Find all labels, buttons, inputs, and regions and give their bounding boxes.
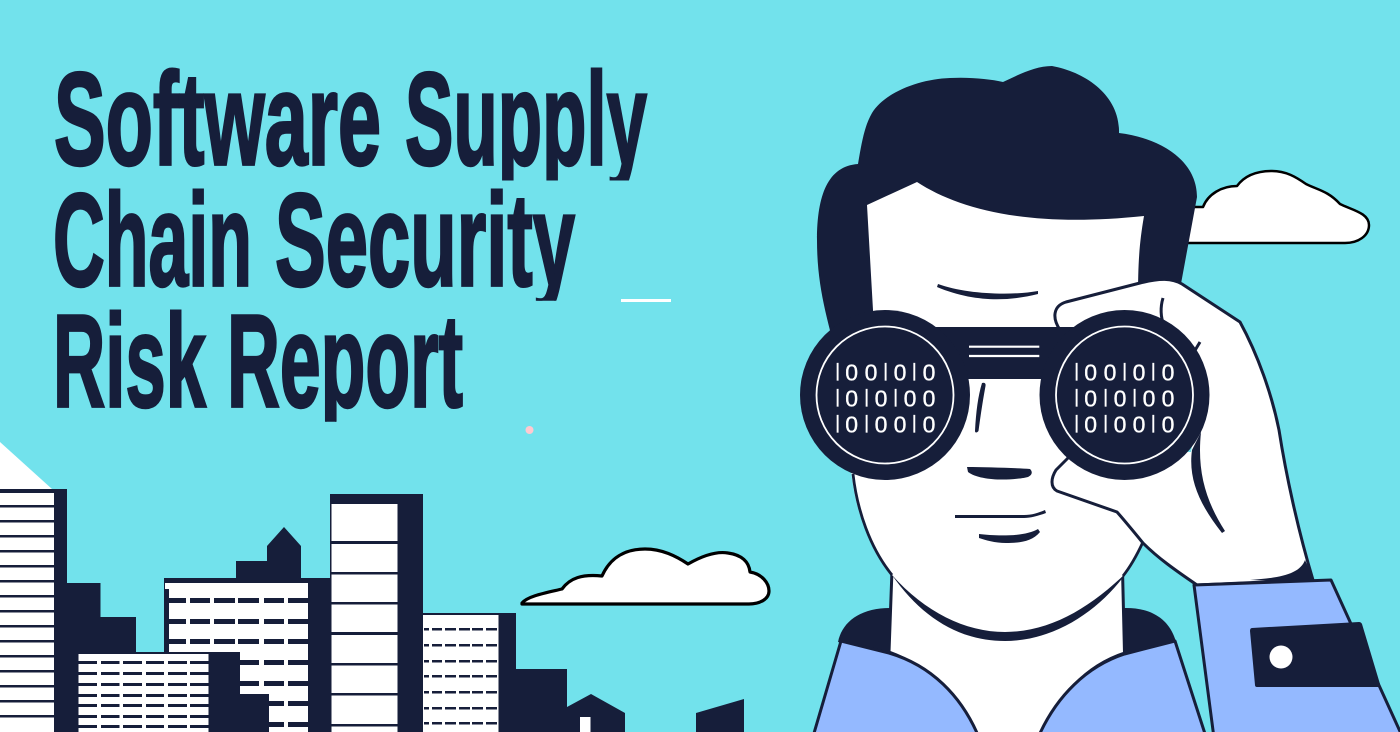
left lens binary digits: 0000 [845,411,935,437]
building: middle with spire [164,527,331,732]
building: dark block [240,694,269,732]
binoculars [800,310,1210,480]
title: Report [227,288,463,434]
pink dot accent [526,426,534,434]
shirt: left collar [812,641,980,732]
building: right striped [423,613,516,732]
shirt: dark inner collar [838,608,1176,656]
binoculars bridge [885,327,1125,379]
house window [580,717,590,732]
palm crease [1191,432,1225,533]
small gap behind binoculars [1187,446,1192,452]
cityscape [0,442,744,732]
title [53,46,647,434]
left lens binary digits [835,359,935,437]
right lens binary digits [1074,359,1174,437]
title: Security [275,166,575,314]
right lens binary digits: ||| [1074,386,1137,406]
right lens [1040,310,1210,480]
nose shadow [967,467,1032,480]
neck [889,570,1124,732]
chin shadow [892,572,1127,641]
left lens binary digits: ||| [835,412,917,432]
mouth [955,510,1046,543]
right lens binary digits: ||| [1074,412,1156,432]
person illustration [800,66,1400,732]
left lens binary digits: 0000 [845,359,935,385]
title: Chain [53,166,252,314]
right lens binary digits: 0000 [1084,359,1174,385]
knuckle tick [1194,342,1200,352]
sleeve [1194,580,1400,732]
left lens binary digits: ||| [835,360,917,380]
left lens binary digits: 0000 [845,385,935,411]
title: Software [54,46,381,192]
bridge detail lines [969,347,1039,356]
wrist shadow [1250,560,1315,582]
nose bridge line [975,383,986,432]
face [851,182,1200,632]
cloud: upper behind head [1180,171,1369,243]
left lens [800,310,970,480]
finger crease [1161,298,1164,326]
title: Risk [53,288,206,434]
title: Supply [405,46,647,192]
left lens binary digits: ||| [835,386,898,406]
right lens binary digits: 0000 [1084,411,1174,437]
cuff button strap [1250,622,1380,687]
building: far left striped tower [0,442,67,732]
face lower outline [853,474,1143,576]
right lens binary digits: 0000 [1084,385,1174,411]
hand [1052,279,1313,585]
dark silhouette with house [516,669,625,732]
far right block [696,699,744,732]
right lens binary digits: ||| [1074,360,1156,380]
white dash accent [621,299,671,302]
cloud: lower [522,549,769,604]
shirt: right collar [1037,641,1207,732]
dark stepped silhouette [67,583,136,732]
building: tall tower [330,494,423,732]
cuff button [1270,646,1292,668]
hair [817,66,1197,370]
building: low front striped [78,652,240,732]
eye [937,284,1038,299]
